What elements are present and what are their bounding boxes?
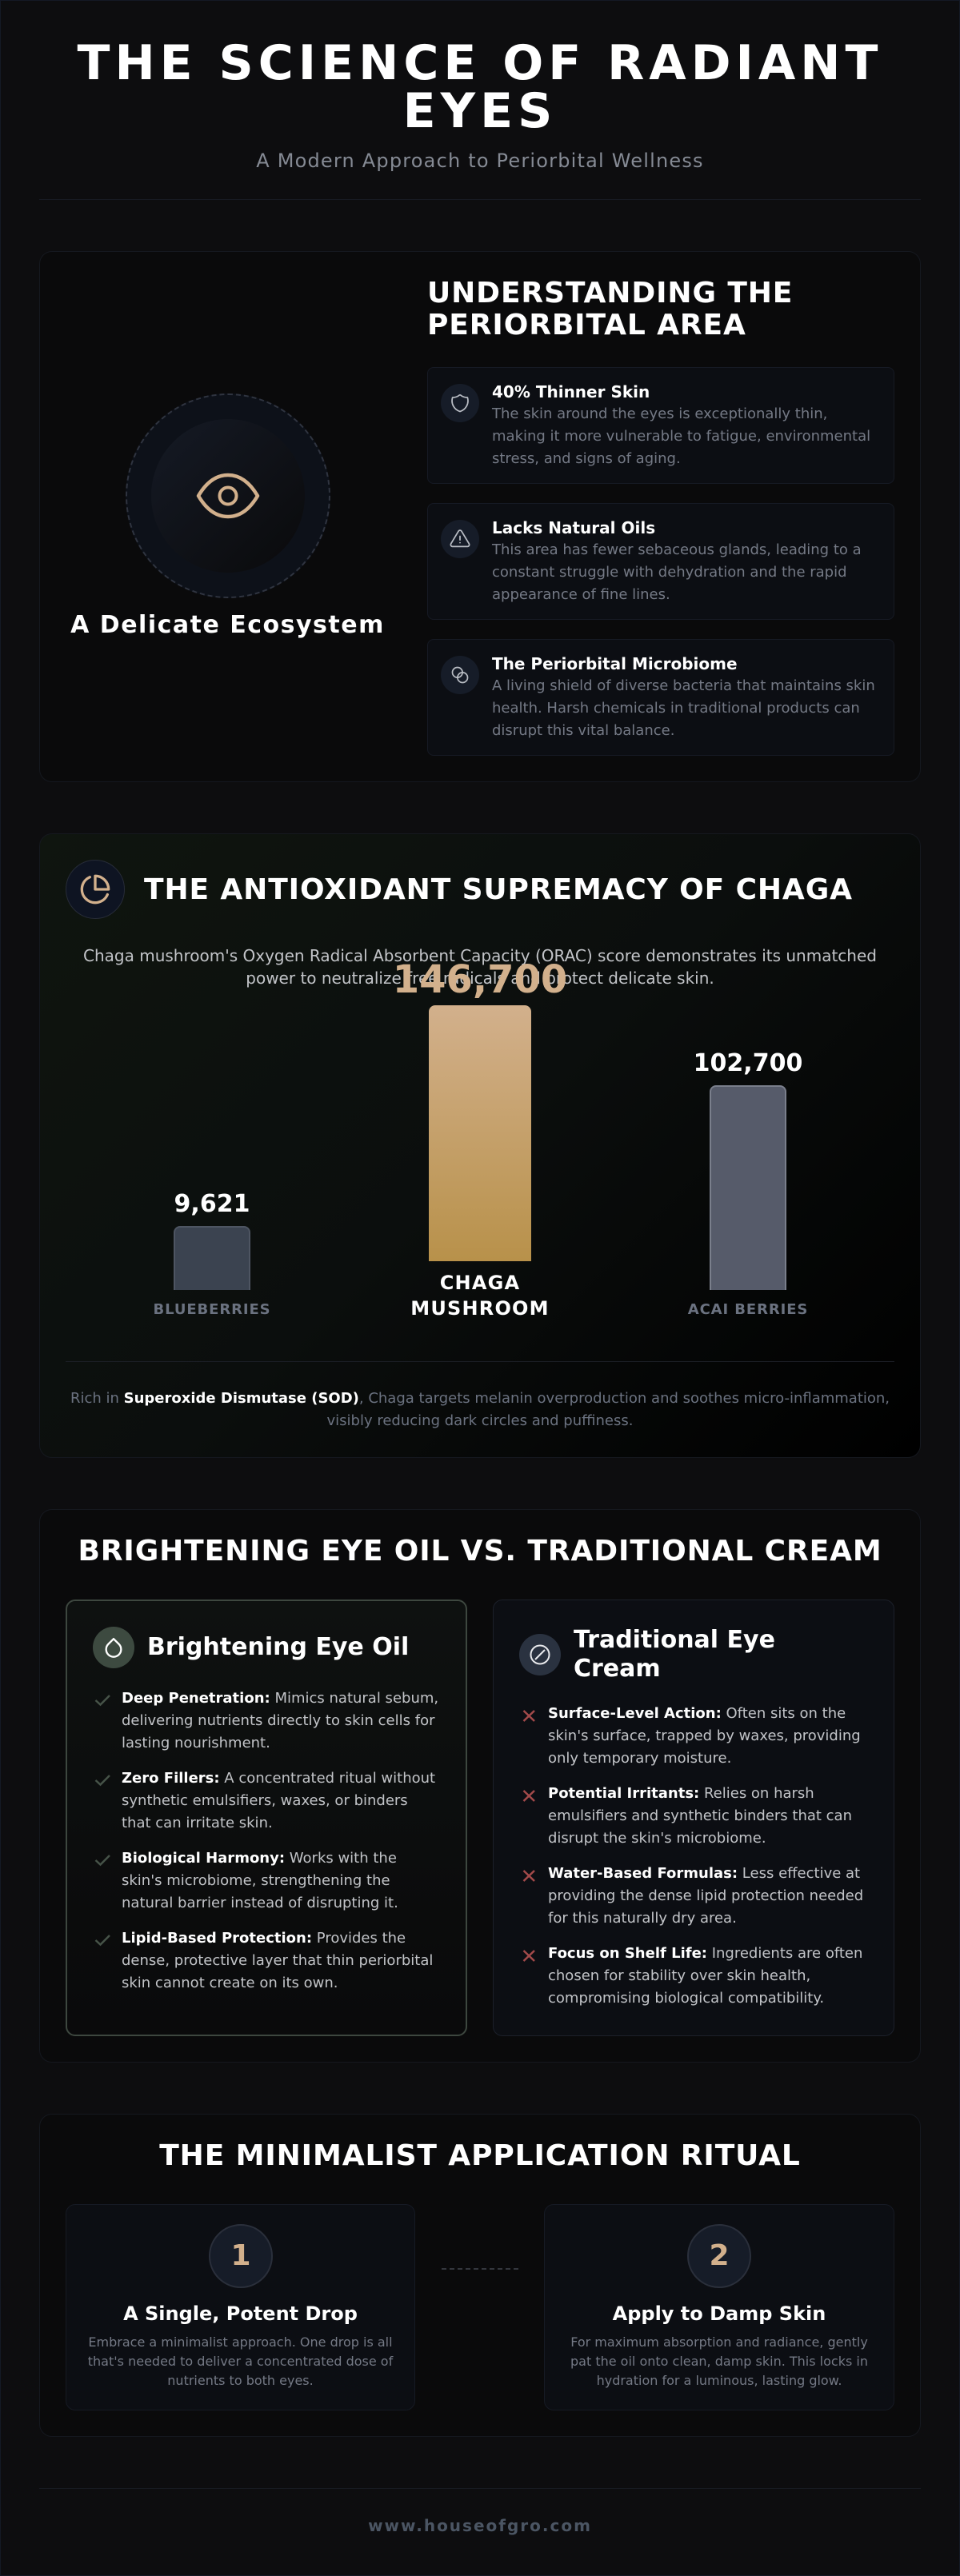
list item bbox=[548, 1865, 863, 1927]
list item: Surface-Level Action: Often sits on the bbox=[548, 1705, 846, 1722]
chaga bar bbox=[429, 1005, 531, 1261]
panel: antioxidant supremacy bbox=[39, 833, 921, 1458]
list item: delivering nutrients directly to skin cells for bbox=[122, 1712, 434, 1729]
list item: dense, protective layer that thin periorbital bbox=[122, 1952, 433, 1969]
title: EYES bbox=[403, 83, 557, 139]
list item bbox=[122, 1930, 433, 1991]
list item: emulsifiers and synthetic binders that can bbox=[548, 1807, 852, 1824]
icon: eye bbox=[197, 473, 259, 518]
icon: pie chart bbox=[66, 860, 125, 919]
intro text: power to neutralize free radicals and protect delicate skin. bbox=[246, 968, 714, 988]
step text bbox=[88, 2334, 394, 2388]
arrow: dashed connector bbox=[442, 2268, 518, 2270]
card text: stress, and signs of aging. bbox=[492, 450, 681, 467]
list item: chosen for stability over skin health, bbox=[548, 1967, 810, 1984]
list item: only temporary moisture. bbox=[548, 1750, 731, 1767]
card title: Cream bbox=[574, 1655, 661, 1683]
step number: 2 bbox=[709, 2239, 730, 2272]
footer url: www.houseofgro.com bbox=[368, 2516, 592, 2535]
heading: UNDERSTANDING THE bbox=[427, 277, 793, 310]
card text: The skin around the eyes is exceptionally thin, bbox=[492, 405, 827, 422]
card text: appearance of fine lines. bbox=[492, 586, 670, 603]
check 1 bbox=[94, 1695, 110, 1707]
step text: For maximum absorption and radiance, gently bbox=[570, 2334, 868, 2350]
intro text: Chaga mushroom's Oxygen Radical Absorbent Capacity (ORAC) score demonstrates its unmatched bbox=[83, 946, 877, 965]
card: microbiome bbox=[427, 639, 894, 756]
step text bbox=[570, 2334, 868, 2388]
card text: health. Harsh chemicals in traditional products can bbox=[492, 700, 860, 717]
eye diagram bbox=[126, 393, 330, 598]
SOD note: Rich in Superoxide Dismutase (SOD), Chaga targets melanin overproduction and soothes micro-inflammation, bbox=[70, 1390, 890, 1407]
card text bbox=[491, 405, 870, 467]
list item: Focus on Shelf Life: Ingredients are often bbox=[548, 1945, 862, 1962]
cross marks bbox=[523, 1710, 535, 1962]
check 3 bbox=[94, 1855, 110, 1867]
list item: skin's surface, trapped by waxes, providing bbox=[548, 1727, 861, 1744]
step text: pat the oil onto clean, damp skin. This locks in bbox=[570, 2354, 868, 2369]
step text: nutrients to both eyes. bbox=[167, 2373, 314, 2388]
card text: making it more vulnerable to fatigue, environmental bbox=[492, 428, 870, 445]
heading: THE ANTIOXIDANT SUPREMACY OF CHAGA bbox=[144, 873, 853, 906]
card title: Brightening Eye Oil bbox=[147, 1633, 409, 1661]
card text bbox=[491, 541, 862, 603]
list item: disrupt the skin's microbiome. bbox=[548, 1830, 766, 1847]
step 2 bbox=[544, 2204, 894, 2410]
blueberries value: 9,621 bbox=[174, 1190, 250, 1218]
step text: Embrace a minimalist approach. One drop is all bbox=[88, 2334, 393, 2350]
blueberries label: BLUEBERRIES bbox=[153, 1301, 271, 1318]
card text: constant struggle with dehydration and the rapid bbox=[492, 564, 847, 581]
card: brightening eye oil bbox=[66, 1600, 467, 2036]
SOD note: visibly reducing dark circles and puffiness. bbox=[327, 1412, 633, 1429]
chaga label: CHAGA bbox=[440, 1272, 520, 1294]
icon: ban bbox=[519, 1634, 561, 1675]
icon: shield bbox=[441, 384, 479, 422]
list item: lasting nourishment. bbox=[122, 1735, 270, 1751]
step number: 1 bbox=[230, 2239, 251, 2272]
step 1 bbox=[66, 2204, 415, 2410]
chaga label bbox=[410, 1272, 550, 1320]
card: lacks natural oils bbox=[427, 503, 894, 620]
heading: BRIGHTENING EYE OIL VS. TRADITIONAL CREAM bbox=[78, 1535, 882, 1568]
step number bbox=[209, 2224, 273, 2288]
step text: hydration for a luminous, lasting glow. bbox=[597, 2373, 842, 2388]
card title: Traditional Eye bbox=[574, 1626, 775, 1654]
list item: synthetic emulsifiers, waxes, or binders bbox=[122, 1792, 408, 1809]
list item bbox=[122, 1850, 398, 1911]
chaga label: MUSHROOM bbox=[410, 1297, 550, 1320]
panel: understanding the periorbital area bbox=[39, 251, 921, 782]
cross 3 bbox=[523, 1870, 535, 1882]
step title: Apply to Damp Skin bbox=[613, 2302, 826, 2325]
list item bbox=[548, 1945, 862, 2007]
list item: Biological Harmony: Works with the bbox=[122, 1850, 397, 1867]
card text: disrupt this vital balance. bbox=[492, 722, 674, 739]
list item: Deep Penetration: Mimics natural sebum, bbox=[122, 1690, 438, 1707]
list item bbox=[548, 1705, 861, 1767]
list item bbox=[548, 1785, 852, 1847]
card: thinner skin bbox=[427, 367, 894, 484]
list item bbox=[122, 1770, 435, 1831]
step text: that's needed to deliver a concentrated dose of bbox=[88, 2354, 393, 2369]
list item: for this naturally dry area. bbox=[548, 1910, 737, 1927]
card title: Lacks Natural Oils bbox=[492, 518, 655, 537]
list item: that can irritate skin. bbox=[122, 1815, 273, 1831]
list item: natural barrier instead of disrupting it. bbox=[122, 1895, 398, 1911]
cross 4 bbox=[523, 1950, 535, 1962]
list item bbox=[122, 1690, 438, 1751]
blueberries bar bbox=[174, 1226, 250, 1290]
bar chart bbox=[153, 957, 808, 1320]
list item: Water-Based Formulas: Less effective at bbox=[548, 1865, 860, 1882]
SOD note bbox=[70, 1390, 890, 1429]
icon: droplet bbox=[93, 1627, 134, 1668]
cross 2 bbox=[523, 1790, 535, 1802]
card title: The Periorbital Microbiome bbox=[492, 654, 738, 673]
card title: 40% Thinner Skin bbox=[492, 382, 650, 401]
list item: compromising biological compatibility. bbox=[548, 1990, 824, 2007]
check 4 bbox=[94, 1935, 110, 1947]
list item: Potential Irritants: Relies on harsh bbox=[548, 1785, 814, 1802]
icon: linked rings bbox=[441, 656, 479, 694]
acai value: 102,700 bbox=[694, 1049, 802, 1077]
list item: skin cannot create on its own. bbox=[122, 1975, 338, 1991]
acai label: ACAI BERRIES bbox=[688, 1301, 808, 1318]
panel: application ritual bbox=[39, 2114, 921, 2437]
chaga value: 146,700 bbox=[393, 957, 567, 1002]
step number bbox=[687, 2224, 751, 2288]
list item: Lipid-Based Protection: Provides the bbox=[122, 1930, 406, 1947]
heading bbox=[427, 277, 793, 341]
subtitle: A Modern Approach to Periorbital Wellness bbox=[256, 150, 704, 172]
list item: Zero Fillers: A concentrated ritual without bbox=[122, 1770, 435, 1787]
icon: warning triangle bbox=[441, 520, 479, 558]
eye diagram caption: A Delicate Ecosystem bbox=[70, 611, 385, 639]
list item: skin's microbiome, strengthening the bbox=[122, 1872, 390, 1889]
title bbox=[77, 35, 882, 139]
card text: A living shield of diverse bacteria that maintains skin bbox=[492, 677, 875, 694]
card text bbox=[492, 677, 875, 739]
intro text bbox=[83, 946, 877, 988]
panel: oil vs cream comparison bbox=[39, 1509, 921, 2063]
check 2 bbox=[94, 1775, 110, 1787]
heading: PERIORBITAL AREA bbox=[427, 309, 746, 341]
check marks bbox=[94, 1695, 110, 1947]
acai bar bbox=[710, 1085, 786, 1290]
card title bbox=[574, 1626, 775, 1683]
card text: This area has fewer sebaceous glands, leading to a bbox=[492, 541, 862, 558]
heading: THE MINIMALIST APPLICATION RITUAL bbox=[159, 2139, 801, 2172]
step title: A Single, Potent Drop bbox=[123, 2302, 358, 2325]
card: traditional eye cream bbox=[493, 1600, 894, 2036]
title: THE SCIENCE OF RADIANT bbox=[78, 35, 882, 91]
cross 1 bbox=[523, 1710, 535, 1722]
list item: providing the dense lipid protection needed bbox=[548, 1887, 863, 1904]
inner circle bbox=[151, 419, 305, 573]
